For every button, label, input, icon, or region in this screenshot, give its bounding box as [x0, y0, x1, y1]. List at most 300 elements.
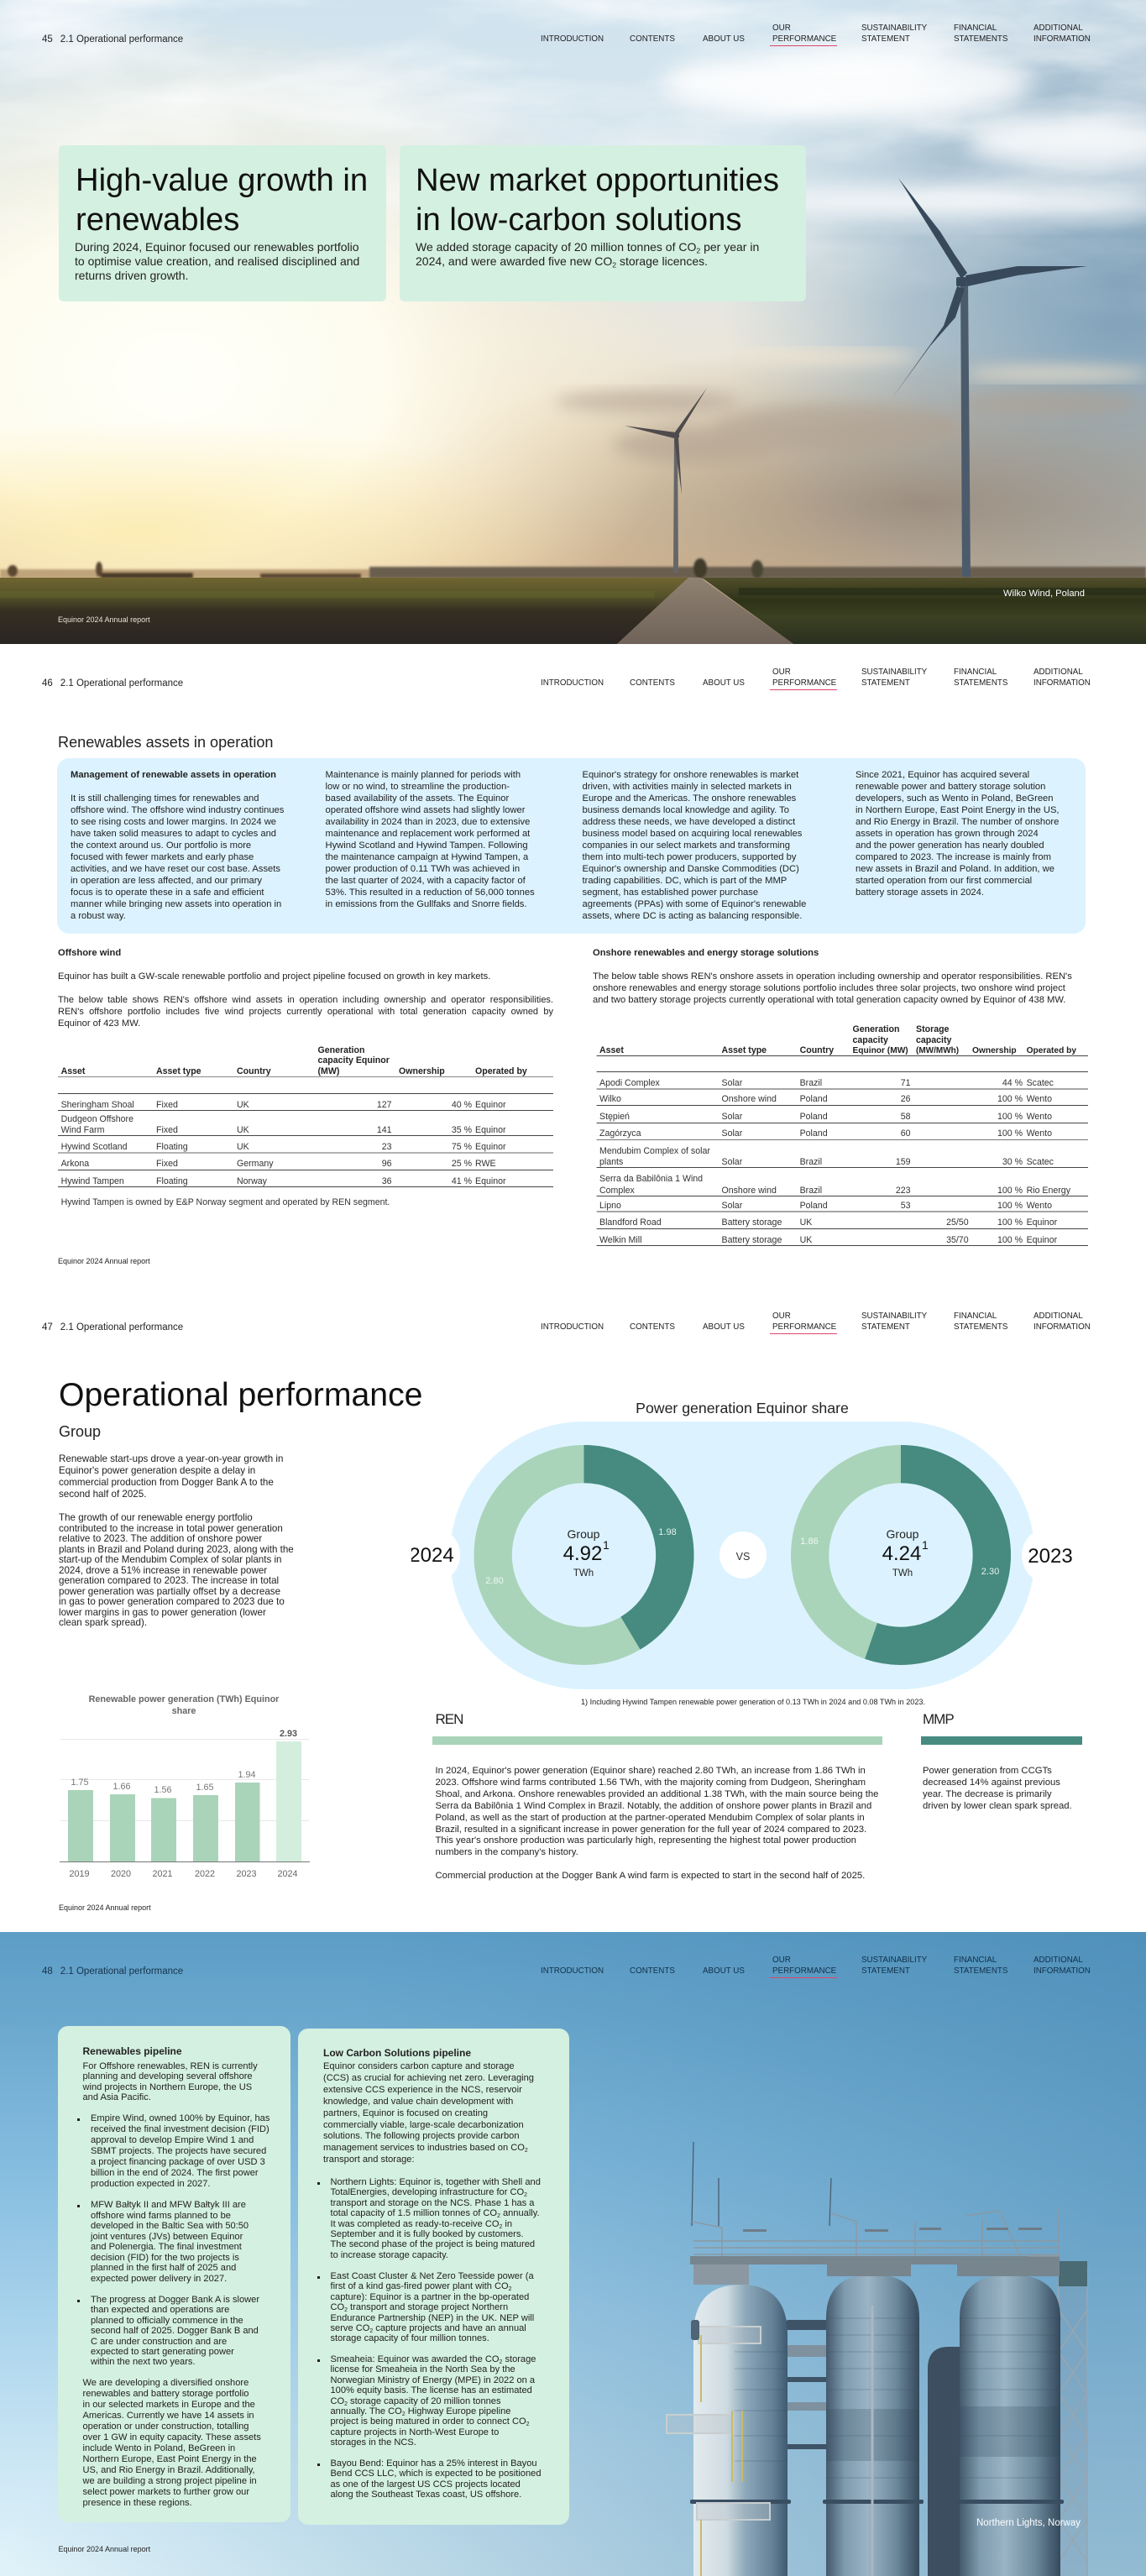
column 4	[856, 770, 1060, 898]
table: offshore wind assets: Floating	[156, 1176, 188, 1186]
bullet: Northern Lights: TotalEnergies, developing infrastructure for CO2	[331, 2187, 527, 2198]
onshore text: US, and Rio Energy in Brazil. Additionally,	[82, 2465, 255, 2475]
column 2: based availability of the assets. The Equinor	[326, 793, 509, 804]
REN text: This year's onshore production was particularly high, representing the highest total power production	[435, 1835, 856, 1846]
table: onshore renewables and storage: 71	[901, 1078, 911, 1088]
table: onshore renewables and storage: Poland	[800, 1201, 828, 1211]
bullet: Northern Lights: total capacity of 1.5 million tonnes of CO2 annually.	[331, 2208, 540, 2219]
table: onshore renewables and storage: Complex	[599, 1186, 636, 1196]
column 1: manner while bringing new assets into operation in	[71, 899, 281, 909]
intro text: planning and developing several offshore	[82, 2071, 253, 2081]
group paragraph 2: generation compared to 2023. The increase in total	[59, 1575, 279, 1586]
column 2	[326, 770, 535, 909]
navigation: FINANCIAL	[954, 24, 997, 33]
offshore wind text: Offshore wind	[58, 948, 121, 958]
table: onshore renewables and storage: Poland	[800, 1112, 828, 1122]
bullet: Dogger Bank: planned to officially commence in the	[91, 2316, 243, 2326]
REN heading: REN	[435, 1711, 463, 1727]
column 4: assets in operation has grown through 2024	[856, 829, 1039, 839]
bullet: East Coast Cluster: East Coast Cluster & Net Zero Teesside power (a	[331, 2271, 534, 2281]
MMP text: year. The decrease is primarily	[923, 1789, 1052, 1799]
group paragraph 2: relative to 2023. The addition of onshore power	[59, 1533, 262, 1544]
onshore renewables text: The below table shows REN's onshore assets in operation including ownership and operator responsibilities. REN's	[593, 971, 1072, 982]
column 1: It is still challenging times for renewables and	[71, 793, 259, 804]
donut 2024	[485, 1464, 677, 1646]
year labels: 2020	[111, 1869, 131, 1879]
table: offshore wind assets: 40 %	[452, 1100, 473, 1110]
bullet: Northern Lights: The second phase of the project is being matured	[331, 2239, 535, 2249]
bullet: Dogger Bank: within the next two years.	[91, 2357, 196, 2367]
onshore text: we are building a strong project pipeline in	[82, 2476, 257, 2486]
column 1: Management of renewable assets in operation	[71, 770, 276, 780]
bullet: Empire Wind	[77, 2113, 279, 2191]
table: offshore wind assets: 141	[377, 1125, 392, 1135]
table: onshore renewables and storage: Asset type	[722, 1045, 767, 1055]
bullet: MFW Bałtyk: decision (FID) for the two projects is	[91, 2252, 239, 2262]
page header: 47 2.1 Operational performance	[42, 1322, 183, 1333]
navigation: STATEMENTS	[954, 34, 1007, 44]
table: offshore wind assets: Floating	[156, 1142, 188, 1152]
group paragraph 2: The growth of our renewable energy portfolio	[59, 1512, 253, 1523]
value labels: 1.75	[71, 1778, 89, 1788]
turbine near	[892, 178, 1087, 577]
donut 2023: 4.24	[882, 1542, 921, 1565]
page 48: renewables and low carbon pipeline	[0, 1932, 1146, 2576]
card: high-value growth in renewables	[59, 145, 386, 301]
group paragraph 2: plants in Brazil and Poland during 2023, along with the	[59, 1543, 294, 1555]
navigation: SUSTAINABILITY	[861, 1312, 927, 1321]
navigation: ABOUT US	[703, 678, 745, 688]
table: onshore renewables and storage: 100 %	[997, 1128, 1023, 1139]
bullet: Smeaheia: storages in the NCS.	[331, 2437, 416, 2448]
table: onshore renewables and storage: Brazil	[800, 1186, 822, 1196]
column 1: focused with fewer markets and early phase	[71, 852, 254, 862]
table: onshore renewables and storage: Scatec	[1027, 1157, 1054, 1167]
bullet: Dogger Bank: expected to start generating power	[91, 2347, 234, 2357]
bullet: Dogger Bank: second half of 2025. Dogger Bank B and	[91, 2326, 259, 2336]
bullet: Northern Lights: transport and storage on the NCS. Phase 1 has a	[331, 2198, 534, 2208]
table: onshore renewables and storage: Onshore wind	[722, 1186, 777, 1196]
body text: returns driven growth.	[75, 269, 188, 282]
column 3: driven, with activities mainly in selected markets in	[583, 782, 792, 792]
intro text: partners, Equinor is focused on creating	[323, 2108, 488, 2118]
table: onshore renewables and storage: Serra da Babilônia 1 Wind	[599, 1174, 703, 1184]
bullet: Northern Lights: to increase storage capacity.	[331, 2250, 448, 2260]
card: renewables pipeline	[57, 2026, 290, 2522]
column 3: business model based on acquiring local renewables	[583, 829, 802, 839]
body text: to optimise value creation, and realised disciplined and	[75, 254, 359, 268]
table: offshore wind assets: RWE	[475, 1159, 496, 1169]
intro text: (CCS) as crucial for achieving net zero. Leveraging	[323, 2073, 534, 2083]
navigation: ABOUT US	[703, 34, 745, 44]
column 4: Since 2021, Equinor has acquired several	[856, 770, 1029, 780]
bullet: Empire Wind: Empire Wind, owned 100% by Equinor, has	[91, 2113, 269, 2123]
table: onshore renewables and storage: Zagórzyca	[599, 1128, 641, 1139]
table: onshore renewables and storage: 60	[901, 1128, 911, 1139]
table: onshore renewables and storage: 53	[901, 1201, 911, 1211]
table: onshore renewables and storage: capacity	[853, 1035, 888, 1045]
body text	[75, 240, 359, 282]
heading: Renewables assets in operation	[58, 734, 273, 751]
donut 2023: Group	[887, 1527, 919, 1541]
year labels: 2024	[277, 1869, 298, 1879]
page header: 46 2.1 Operational performance	[42, 678, 183, 689]
column 1: the context around us. Our portfolio is more	[71, 840, 251, 851]
navigation	[541, 668, 1091, 690]
navigation: INTRODUCTION	[541, 1322, 604, 1332]
body text: 2024, and were awarded five new CO2 storage licences.	[416, 254, 708, 269]
column 3: address these needs, we have developed a distinct	[583, 817, 795, 827]
card: new market opportunities	[400, 145, 806, 301]
intro text: commercially viable, large-scale decarbonization	[323, 2120, 524, 2130]
MMP heading: MMP	[923, 1711, 954, 1727]
tanks	[693, 2285, 788, 2576]
column 3: agreements (PPAs) with some of Equinor's renewable	[583, 899, 806, 909]
navigation: INTRODUCTION	[541, 1966, 604, 1976]
intro text: wind projects in Northern Europe, the US	[82, 2082, 252, 2092]
table: onshore renewables and storage: 100 %	[997, 1186, 1023, 1196]
column 1: have taken solid measures to adapt to cycles and	[71, 829, 276, 839]
bullet: Smeaheia: capture projects in North-West Europe to	[331, 2427, 499, 2437]
navigation: FINANCIAL	[954, 668, 997, 677]
heading: New market opportunities	[416, 162, 779, 198]
heading: renewables	[76, 202, 239, 238]
column 2: 53%. This resulted in a reduction of 56,000 tonnes	[326, 887, 535, 898]
REN text: Poland, as well as the start of production at the partner-operated Mendubim Complex of solar plants in	[435, 1813, 865, 1823]
table: onshore renewables and storage: Poland	[800, 1128, 828, 1139]
navigation: ABOUT US	[703, 1966, 745, 1976]
column 2: low or no wind, to streamline the production-	[326, 782, 510, 792]
navigation: SUSTAINABILITY	[861, 1956, 927, 1965]
table: offshore wind assets: 36	[382, 1176, 392, 1186]
table: onshore renewables and storage: Mendubim Complex of solar	[599, 1146, 710, 1156]
table: offshore wind assets: Fixed	[156, 1125, 178, 1135]
onshore text: Northern Europe, East Point Energy in the	[82, 2454, 257, 2464]
bullet: Dogger Bank: C are under construction and are	[91, 2337, 227, 2347]
value labels	[71, 1729, 297, 1795]
photo caption: Northern Lights, Norway	[976, 2518, 1081, 2528]
page 45: wind turbines hero	[0, 0, 1146, 644]
navigation: FINANCIAL	[954, 1312, 997, 1321]
onshore text: We are developing a diversified onshore	[82, 2378, 249, 2388]
group paragraph 2: power generation was partially offset by a decrease	[59, 1585, 280, 1597]
MMP text: decreased 14% against previous	[923, 1778, 1060, 1788]
table: offshore wind assets: Sheringham Shoal	[61, 1100, 134, 1110]
bullet: MFW Bałtyk: developed in the Baltic Sea with 50:50	[91, 2221, 249, 2231]
table: onshore renewables and storage: 100 %	[997, 1094, 1023, 1104]
column 2: power production of 0.11 TWh was achieved in	[326, 864, 520, 874]
column 3: Equinor's strategy for onshore renewables is market	[583, 770, 798, 780]
MMP legend bar	[921, 1736, 1082, 1745]
table: onshore renewables and storage: 100 %	[997, 1112, 1023, 1122]
year labels: 2023	[1028, 1545, 1073, 1568]
footer: Equinor 2024 Annual report	[59, 2545, 150, 2553]
navigation: OUR	[772, 1956, 791, 1965]
onshore text	[82, 2378, 261, 2509]
table: onshore renewables and storage: Solar	[722, 1128, 743, 1139]
heading: Low Carbon Solutions pipeline	[323, 2047, 471, 2059]
table: onshore renewables and storage: Asset	[599, 1045, 624, 1055]
year labels	[409, 1544, 1073, 1568]
REN text: Serra da Babilônia 1 Wind Complex in Brazil. Notably, the addition of onshore power plants in Brazil and	[435, 1801, 871, 1811]
horizon treeline	[0, 558, 1146, 579]
antennas	[692, 2142, 831, 2226]
donut 2024: 1.98	[658, 1527, 677, 1537]
table: onshore renewables and storage: 35/70	[946, 1235, 969, 1245]
footer: Equinor 2024 Annual report	[59, 1903, 151, 1912]
navigation: STATEMENT	[861, 34, 910, 44]
column 4: renewable power and battery storage solution	[856, 782, 1045, 792]
table: onshore renewables and storage: Brazil	[800, 1157, 822, 1167]
fields	[0, 578, 688, 644]
table: onshore renewables and storage: Battery storage	[722, 1217, 782, 1228]
bullet: Smeaheia: project is being matured in order to connect CO2	[331, 2416, 529, 2427]
page header: 45 2.1 Operational performance	[42, 34, 183, 45]
column 3: business demands local knowledge and agility. To	[583, 805, 789, 815]
group paragraph 2: 2024, drove a 51% increase in renewable power	[59, 1565, 267, 1575]
navigation: OUR	[772, 24, 791, 33]
connecting pipes	[785, 2320, 829, 2449]
bullet: Bayou Bend: along the Southeast Texas coast, US offshore.	[331, 2490, 521, 2500]
bullet: Smeaheia	[317, 2354, 561, 2449]
column 2: the last quarter of 2024, with a capacity factor of	[326, 876, 526, 886]
year labels: 2023	[236, 1869, 257, 1879]
table: onshore renewables and storage: 159	[896, 1157, 911, 1167]
bullet: Bayou Bend: Bend CCS LLC, which is expected to be positioned	[331, 2469, 541, 2479]
behind tank	[928, 2347, 965, 2576]
group paragraph 2: in gas to power generation compared to 2023 due to	[59, 1596, 285, 1607]
value labels: 1.65	[196, 1783, 214, 1793]
navigation: INFORMATION	[1033, 1966, 1091, 1976]
navigation	[541, 24, 1091, 46]
value labels: 1.66	[113, 1782, 131, 1792]
heading: Renewables pipeline	[82, 2045, 182, 2057]
card: low carbon solutions pipeline	[298, 2029, 569, 2525]
table: offshore wind assets: Arkona	[61, 1159, 89, 1169]
year labels	[69, 1869, 298, 1879]
column 1: activities, and we have reset our cost base. Assets	[71, 864, 280, 874]
photo caption: Wilko Wind, Poland	[1003, 589, 1085, 599]
REN text: Brazil, resulted in a significant increase in power generation for the full year of 2024 compared to 2023.	[435, 1825, 866, 1835]
top platform	[690, 2256, 1060, 2285]
intro text: transport and storage:	[323, 2155, 415, 2165]
year labels: 2021	[152, 1869, 173, 1879]
table: onshore renewables and storage: Apodi Complex	[599, 1078, 661, 1088]
table: offshore wind assets: Generation	[317, 1045, 364, 1055]
bullet: East Coast Cluster	[317, 2271, 561, 2345]
group paragraph 1: second half of 2025.	[59, 1489, 146, 1500]
group paragraph 2: clean spark spread).	[59, 1617, 147, 1628]
road	[617, 578, 793, 644]
column 2: in emissions from the Gullfaks and Snorre fields.	[326, 899, 527, 909]
navigation: STATEMENTS	[954, 1966, 1007, 1976]
column 4: new assets in Brazil and Poland. In addition, we	[856, 864, 1054, 874]
intro text: For Offshore renewables, REN is currently	[82, 2061, 258, 2071]
table: offshore wind assets: Equinor	[475, 1142, 506, 1152]
navigation: STATEMENTS	[954, 1322, 1007, 1332]
donut 2023: TWh	[892, 1568, 913, 1579]
heading	[416, 162, 779, 238]
donut 2023: 1	[922, 1538, 929, 1552]
column 3: trading capabilities. DC, which is part of the MMP	[583, 876, 787, 886]
donut comparison: power generation equinor share	[411, 1400, 1073, 1689]
navigation: SUSTAINABILITY	[861, 24, 927, 33]
table: onshore renewables and storage: Ownership	[972, 1046, 1017, 1055]
page 46: renewables assets in operation	[0, 644, 1146, 1288]
table: offshore wind assets: Dudgeon Offshore	[61, 1114, 133, 1124]
table: onshore renewables and storage: Solar	[722, 1112, 743, 1122]
bullet: Smeaheia: Norwegian Ministry of Energy (MPE) in 2022 on a	[331, 2375, 535, 2385]
navigation: SUSTAINABILITY	[861, 668, 927, 677]
table: onshore renewables and storage: (MW/MWh)	[916, 1046, 959, 1055]
navigation: ADDITIONAL	[1033, 1312, 1083, 1321]
table: onshore renewables and storage: Generation	[853, 1024, 899, 1034]
table: offshore wind assets: Asset type	[156, 1066, 201, 1076]
bullet: Empire Wind: received the final investment decision (FID)	[91, 2124, 269, 2134]
table: onshore renewables and storage: Blandford Road	[599, 1217, 662, 1228]
group paragraph 1	[59, 1453, 283, 1500]
table: onshore renewables and storage: capacity	[916, 1035, 952, 1045]
turbine far	[625, 388, 707, 573]
group paragraph 2	[59, 1512, 294, 1628]
versus badge	[720, 1531, 767, 1579]
navigation: STATEMENT	[861, 1322, 910, 1332]
footer: Equinor 2024 Annual report	[58, 1257, 150, 1265]
heading: High-value growth in	[76, 162, 368, 198]
donut 2024: 1	[603, 1538, 610, 1552]
table: onshore renewables and storage: Wento	[1027, 1201, 1052, 1211]
bullet: Northern Lights: Northern Lights: Equinor is, together with Shell and	[331, 2177, 541, 2187]
REN legend bar	[432, 1736, 882, 1745]
column 1: offshore wind. The offshore wind industry continues	[71, 805, 284, 815]
column 4: in Northern Europe, East Point Energy in the US,	[856, 805, 1060, 815]
table: onshore renewables and storage: Country	[800, 1045, 834, 1055]
table: onshore renewables and storage: Welkin Mill	[599, 1235, 641, 1245]
table: onshore renewables and storage: Poland	[800, 1094, 828, 1104]
table: onshore renewables and storage: Rio Energy	[1027, 1186, 1071, 1196]
donut 2024: Group	[568, 1527, 600, 1541]
table: onshore renewables and storage: Battery storage	[722, 1235, 782, 1245]
table: onshore renewables and storage: Wento	[1027, 1094, 1052, 1104]
bullet: MFW Bałtyk: and Polenergia. The final investment	[91, 2242, 242, 2252]
bullet: MFW Bałtyk: offshore wind farms planned to be	[91, 2210, 231, 2220]
bullet: MFW Bałtyk	[77, 2200, 279, 2284]
column 2: availability in 2024 than in 2023, due to extensive	[326, 817, 530, 827]
chart title	[89, 1694, 280, 1716]
table: offshore wind assets: 25 %	[452, 1159, 473, 1169]
column 1: in operation are less affected, and our primary	[71, 876, 262, 886]
column 2: the maintenance campaign at Hywind Tampen, a	[326, 852, 528, 862]
column 2: maintenance and replacement work performed at	[326, 829, 530, 839]
bars	[68, 1741, 301, 1861]
photo: wind turbines at sunset	[0, 0, 1146, 644]
value labels: 2.93	[280, 1729, 297, 1739]
column 3: Equinor's ownership and Danske Commodities (DC)	[583, 864, 799, 874]
table: offshore wind assets: Fixed	[156, 1100, 178, 1110]
offshore wind text: Equinor has built a GW-scale renewable portfolio and project pipeline focused on growth in key markets.	[58, 971, 490, 982]
table: onshore renewables and storage	[596, 1024, 1088, 1246]
column 3	[583, 770, 806, 921]
table: offshore wind assets: 23	[382, 1142, 392, 1152]
navigation: ADDITIONAL	[1033, 1956, 1083, 1965]
table: onshore renewables and storage: Wilko	[599, 1094, 621, 1104]
group paragraph 2: contributed to the increase in total power generation	[59, 1523, 283, 1533]
table: onshore renewables and storage: Wento	[1027, 1112, 1052, 1122]
table: onshore renewables and storage: Solar	[722, 1201, 743, 1211]
table: onshore renewables and storage: 100 %	[997, 1217, 1023, 1228]
table: offshore wind assets: Ownership	[399, 1066, 445, 1076]
bullet: Dogger Bank	[77, 2295, 279, 2369]
intro text	[323, 2061, 534, 2166]
scaffold	[1059, 2268, 1087, 2576]
table: onshore renewables and storage: 58	[901, 1112, 911, 1122]
column 3: Europe and the Americas. The onshore renewables	[583, 793, 796, 804]
chart title: Power generation Equinor share	[636, 1400, 849, 1416]
onshore renewables text: Onshore renewables and energy storage solutions	[593, 948, 819, 958]
heading: in low-carbon solutions	[416, 202, 741, 238]
column 1	[71, 770, 284, 921]
table: offshore wind assets: Hywind Tampen is owned by E&P Norway segment and operated by REN segment.	[61, 1197, 390, 1207]
navigation	[541, 1312, 1091, 1334]
table: onshore renewables and storage: Equinor (MW)	[853, 1046, 908, 1055]
navigation: PERFORMANCE	[772, 1322, 836, 1332]
chart title: share	[172, 1706, 196, 1716]
body text: During 2024, Equinor focused our renewables portfolio	[75, 240, 359, 254]
donut 2024: 2.80	[485, 1576, 504, 1586]
table: offshore wind assets: Hywind Tampen	[61, 1176, 124, 1186]
donut 2024: TWh	[573, 1568, 594, 1579]
onshore renewables text	[593, 948, 1072, 1005]
onshore text: select power markets to further grow our	[82, 2487, 249, 2497]
table: onshore renewables and storage: Scatec	[1027, 1078, 1054, 1088]
table: offshore wind assets: 41 %	[452, 1176, 473, 1186]
table: onshore renewables and storage: 30 %	[1002, 1157, 1023, 1167]
onshore text: renewables and battery storage portfolio	[82, 2389, 249, 2399]
column 4: and the power generation has nearly doubled	[856, 840, 1044, 851]
table: offshore wind assets: Asset	[61, 1066, 86, 1076]
offshore wind text: The below table shows REN's offshore wind assets in operation including ownership and operator responsibilities.	[58, 995, 553, 1005]
table: onshore renewables and storage: 25/50	[946, 1217, 969, 1228]
group paragraph 1: Equinor's power generation despite a delay in	[59, 1465, 255, 1476]
table: onshore renewables and storage: Brazil	[800, 1078, 822, 1088]
table: offshore wind assets: 96	[382, 1159, 392, 1169]
navigation: PERFORMANCE	[772, 678, 836, 688]
footer: Equinor 2024 Annual report	[58, 615, 150, 624]
bullet: Empire Wind: production expected in 2027.	[91, 2179, 210, 2189]
bullet: East Coast Cluster: capture): Equinor is a partner in the bp-operated	[331, 2292, 529, 2302]
table: offshore wind assets: UK	[237, 1125, 249, 1135]
table: offshore wind assets: (MW)	[317, 1066, 339, 1076]
bullet: Bayou Bend	[317, 2458, 561, 2500]
group paragraph 2: lower margins in gas to power generation (lower	[59, 1607, 266, 1617]
photo: northern lights facility against blue sky	[0, 1932, 1146, 2576]
navigation: CONTENTS	[630, 1322, 675, 1332]
page 47: operational performance group	[0, 1288, 1146, 1932]
onshore text: include Wento in Poland, BeGreen in	[82, 2443, 235, 2453]
intro text: knowledge, and value chain development with	[323, 2097, 513, 2107]
bullet: East Coast Cluster: first of a kind gas-fired power plant with CO2	[331, 2281, 511, 2292]
column 3: segment, has established power purchase	[583, 887, 758, 898]
bullet: Dogger Bank: than expected and operations are	[91, 2305, 229, 2315]
table: onshore renewables and storage: 223	[896, 1186, 911, 1196]
navigation: OUR	[772, 1312, 791, 1321]
onshore text: operation or under construction, totalling	[82, 2422, 249, 2432]
table: onshore renewables and storage: Operated by	[1027, 1046, 1076, 1055]
navigation: STATEMENT	[861, 678, 910, 688]
table: onshore renewables and storage: Equinor	[1027, 1235, 1058, 1245]
group paragraph 1: commercial production from Dogger Bank A to the	[59, 1477, 274, 1488]
table: onshore renewables and storage: Storage	[916, 1024, 950, 1034]
